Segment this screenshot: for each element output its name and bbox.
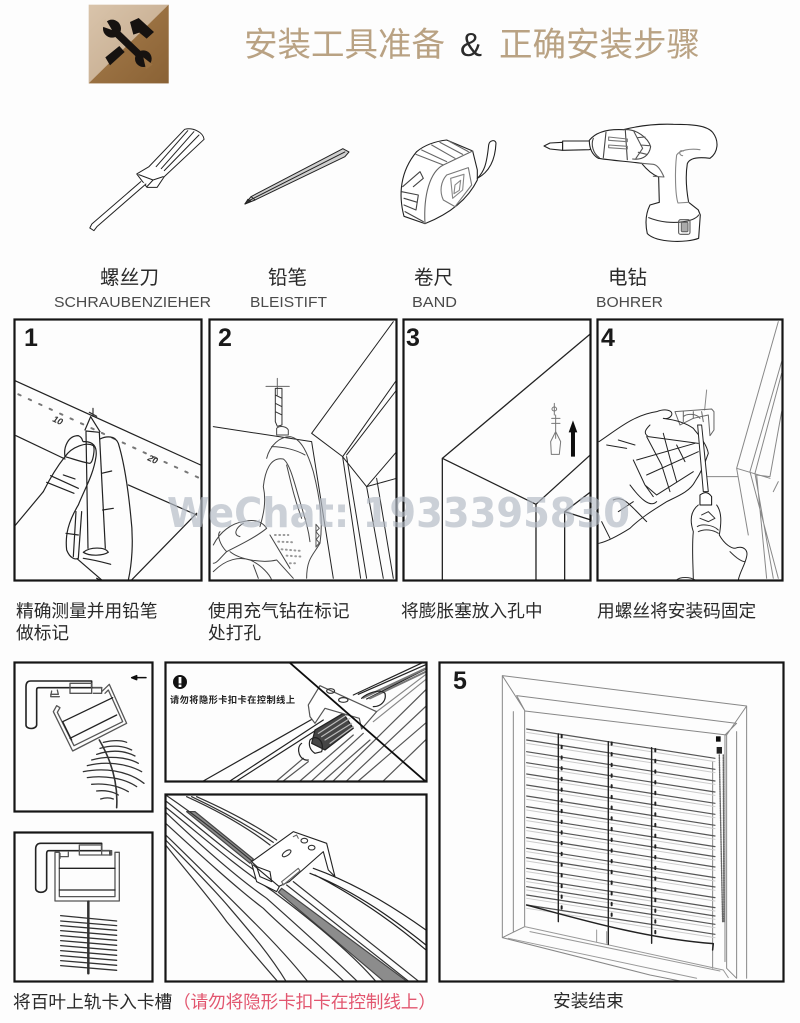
pull cord <box>716 736 724 922</box>
slats <box>527 729 715 938</box>
panel 4: fix bracket with screws <box>598 320 782 580</box>
ruler numbers: 20 <box>145 452 159 466</box>
tool labels: 螺丝刀 <box>100 267 159 289</box>
bottom rail <box>527 905 713 950</box>
tool labels <box>54 267 663 311</box>
title: 正确安装步骤 <box>499 27 700 64</box>
watermark: WeChat: 1933395830 <box>167 489 630 537</box>
panel: rail tilted into clip <box>14 662 152 812</box>
caption: step 1: 做标记 <box>16 623 69 643</box>
caption: installation finished: 安装结束 <box>553 991 624 1011</box>
panel 3: insert wall plug: 3 <box>406 324 420 352</box>
panel: clip on rail close-up <box>165 794 426 982</box>
tool labels: SCHRAUBENZIEHER <box>54 294 211 311</box>
warning text: 请勿将隐形卡扣卡在控制线上 <box>170 694 295 705</box>
panel 1: measure and mark with pencil: 1 <box>24 324 38 352</box>
panel 4: fix bracket with screws: 4 <box>601 324 615 352</box>
panel 3: insert wall plug <box>404 320 591 580</box>
title: 安装工具准备 <box>244 27 445 64</box>
panel 2: drill the hole at the mark <box>210 320 397 580</box>
caption: slot rail into clip: （请勿将隐形卡扣卡在控制线上） <box>173 992 436 1012</box>
title <box>244 26 700 64</box>
panel 5: finished blind in window: 5 <box>453 667 467 695</box>
panel 5: finished blind in window <box>440 662 784 982</box>
ruler numbers <box>51 414 159 466</box>
caption: step 3: 将膨胀塞放入孔中 <box>401 601 543 621</box>
ladder cords <box>558 734 655 944</box>
icon: crossed wrench and hammer badge <box>89 5 169 83</box>
warning icon <box>173 675 187 689</box>
caption: step 4: 用螺丝将安装码固定 <box>597 601 756 621</box>
title: & <box>460 26 482 63</box>
panel: warning view with clip on control line <box>166 662 427 782</box>
tool labels: BAND <box>412 294 457 311</box>
window frame <box>502 676 747 982</box>
panel: rail seated in clip <box>14 832 152 982</box>
caption: step 2: 处打孔 <box>208 623 261 643</box>
caption: step 1: 精确测量并用铅笔 <box>16 601 158 621</box>
caption: step 2: 使用充气钻在标记 <box>208 601 350 621</box>
tool labels: 电钻 <box>608 267 647 289</box>
tool labels: 卷尺 <box>414 267 453 289</box>
caption: slot rail into clip <box>13 992 436 1012</box>
icon: screwdriver <box>90 129 204 231</box>
tool labels: 铅笔 <box>268 267 307 289</box>
icon: tape measure <box>401 140 496 224</box>
ruler numbers: 10 <box>51 414 64 427</box>
caption: slot rail into clip: 将百叶上轨卡入卡槽 <box>13 992 172 1012</box>
panel 2: drill the hole at the mark: 2 <box>218 324 232 352</box>
icon: pencil <box>245 149 349 204</box>
icon: cordless drill <box>544 124 717 241</box>
panel 1: measure and mark with pencil <box>14 320 202 580</box>
tool labels: BOHRER <box>596 294 663 311</box>
tool labels: BLEISTIFT <box>250 294 327 311</box>
